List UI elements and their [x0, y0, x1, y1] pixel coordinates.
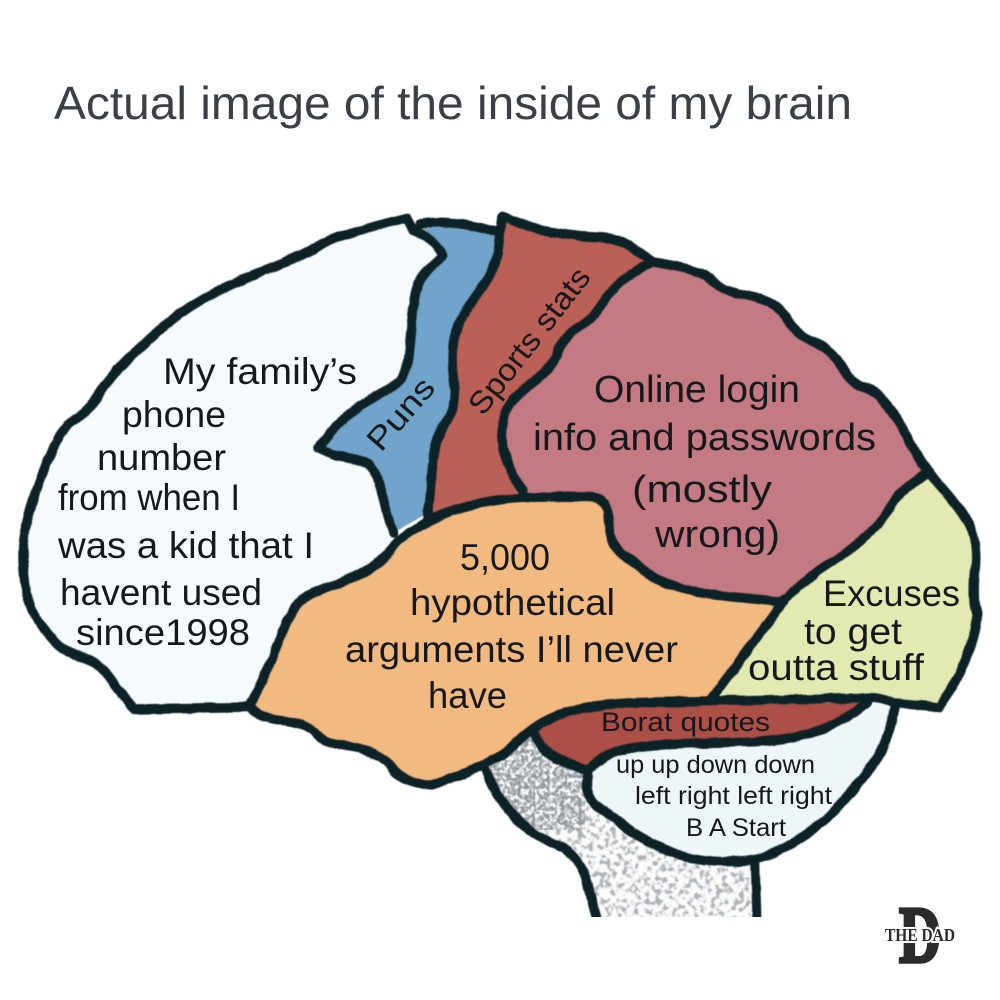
region: frontal lobe, white	[22, 218, 443, 707]
region: hypothetical arguments, orange	[250, 497, 783, 787]
text: hypothetical arguments: 5,000	[460, 537, 550, 578]
text: excuses	[748, 573, 960, 688]
text: online login: (mostly	[632, 469, 772, 511]
text: my family's phone number: was a kid that I	[57, 525, 314, 566]
text: hypothetical arguments: have	[428, 675, 507, 716]
text: my family's phone number: havent used	[60, 572, 262, 613]
text: my family's phone number: from when I	[58, 477, 240, 518]
region: sports stats, red	[428, 217, 653, 522]
text: my family's phone number	[57, 351, 357, 653]
region: cerebellum, pale blue	[585, 700, 897, 863]
title: Actual image of the inside of my brain	[54, 77, 852, 129]
text: hypothetical arguments: arguments I’ll never	[345, 629, 678, 670]
region: puns, blue	[318, 220, 497, 533]
region: online login, pink	[500, 262, 928, 600]
label: puns: Puns	[359, 370, 442, 458]
text: my family's phone number: since1998	[76, 612, 250, 653]
brain outlines	[23, 216, 977, 930]
text: konami code: up up down down	[616, 751, 815, 779]
brainstem speckle	[490, 736, 754, 917]
text: my family's phone number: My family’s	[163, 351, 357, 392]
text: online login: info and passwords	[533, 417, 876, 459]
text: online login	[533, 369, 876, 556]
text: excuses: to get	[804, 611, 903, 652]
text: my family's phone number: number	[97, 437, 226, 478]
text: excuses: outta stuff	[748, 647, 925, 688]
text: online login: Online login	[594, 369, 800, 411]
brain diagram	[22, 216, 980, 930]
label: borat quotes: Borat quotes	[601, 707, 770, 737]
text: my family's phone number: phone	[122, 394, 226, 435]
text: hypothetical arguments: hypothetical	[410, 582, 615, 623]
region: excuses, green	[710, 472, 980, 707]
text: konami code: B A Start	[686, 814, 786, 842]
text: excuses: Excuses	[823, 573, 960, 614]
logo: the dad: THE DAD	[885, 925, 955, 945]
region: borat quotes, dark red	[538, 702, 860, 766]
logo: the dad: D	[899, 892, 941, 980]
text: konami code: left right left right	[635, 782, 832, 810]
text: hypothetical arguments	[345, 537, 678, 716]
label: sports stats: Sports stats	[461, 260, 597, 421]
text: online login: wrong)	[654, 514, 780, 556]
text: konami code	[616, 751, 832, 842]
